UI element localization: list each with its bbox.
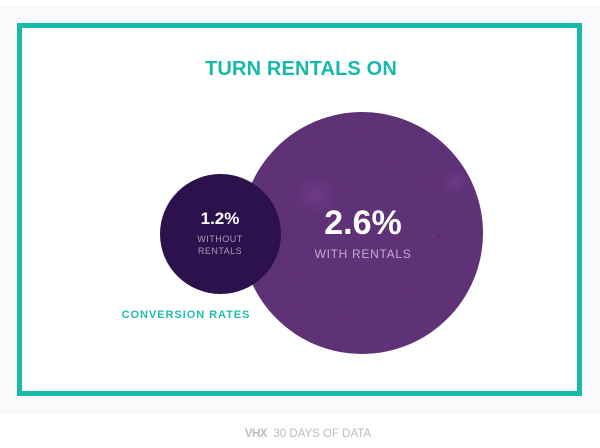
value: 1.2%: 1.2% xyxy=(201,209,239,228)
label: conversion rates: CONVERSION RATES xyxy=(122,309,250,321)
label: without rentals: RENTALS xyxy=(198,246,242,256)
label: without rentals: WITHOUT xyxy=(197,234,243,244)
value: 2.6%: 2.6% xyxy=(324,204,402,242)
circle: without rentals xyxy=(160,174,281,294)
label: without rentals xyxy=(197,234,243,256)
label: with rentals: WITH RENTALS xyxy=(315,247,411,261)
title: TURN RENTALS ON xyxy=(205,58,397,80)
footer: brand credit: VHX 30 DAYS OF DATA xyxy=(245,428,371,440)
circle: with rentals xyxy=(241,112,483,354)
starfield texture xyxy=(294,129,469,336)
panel: framed card xyxy=(17,23,582,396)
